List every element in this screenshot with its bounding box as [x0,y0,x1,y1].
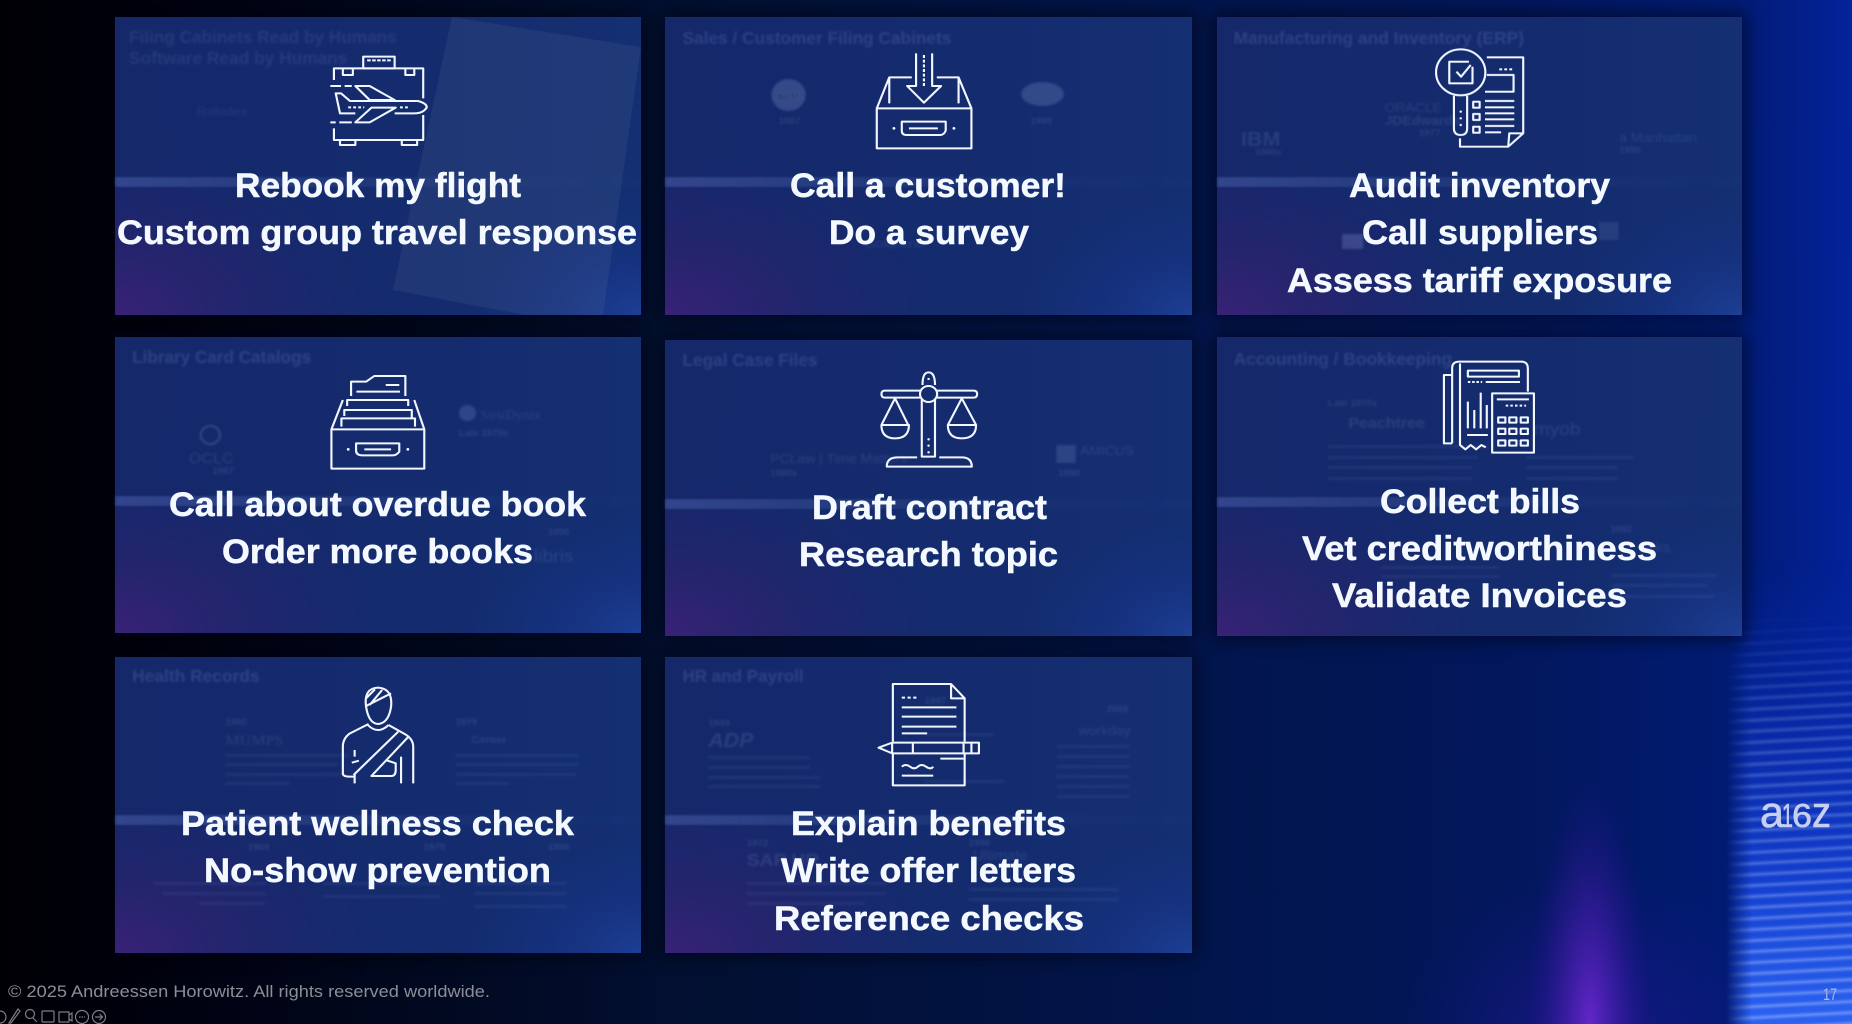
faded content [682,28,1064,251]
text: panel tasks: Validate Invoices [1332,577,1627,615]
text: panel tasks: Do a survey [829,214,1029,252]
text: panel tasks: Call suppliers [1362,214,1598,252]
icon: document with magnifier [1436,49,1523,147]
logo: a16z: 6 [1792,797,1812,834]
faded heading: Rolodex [196,104,248,119]
faded content: Library Card Catalogs [132,347,311,367]
panel: library [115,337,641,633]
faded content: Manufacturing and Inventory (ERP) [1234,28,1524,48]
text: panel tasks: No-show prevention [204,852,551,890]
faded content: 1999 [1031,116,1052,126]
faded content: workday [1078,723,1131,738]
faded content: JDEdwards [1385,113,1460,128]
faded content: Late 1970s [459,428,508,438]
text: panel tasks: Collect bills [1380,483,1580,521]
panel background [665,17,1192,315]
text: panel tasks: Custom group travel response [117,214,637,252]
faded content: 1990 [548,527,569,537]
text: panel tasks: Research topic [799,536,1058,574]
panel: health records [115,657,641,953]
panel: legal [665,340,1192,636]
icon: briefcase with plane [330,57,427,145]
faded content: 2005 [1107,704,1128,714]
text: panel tasks: Explain benefits [791,805,1066,843]
logo: a16z: 1 [1782,797,1793,834]
text: panel tasks [774,805,1084,938]
faded content: 1990 [969,838,990,848]
copyright footer: © 2025 Andreessen Horowitz. All rights reserved worldwide. [8,982,490,1001]
faded content: HR and Payroll [682,666,804,686]
text: panel tasks: Reference checks [774,900,1084,938]
faded content: Legal Case Files [682,350,817,370]
icon: patient with sling [343,688,413,783]
text: panel tasks: Assess tariff exposure [1287,262,1672,300]
faded content [1234,28,1697,249]
text: panel tasks: Vet creditworthiness [1302,530,1657,568]
faded content: 1949 [708,718,730,728]
panel: call a customer [665,17,1192,315]
faded content: Health Records [132,666,260,686]
faded content: Ultimate [973,848,1028,864]
faded content: 1990 [1619,145,1641,155]
panel background [115,17,641,315]
faded content: a Manhattan [1619,130,1697,145]
faded content: 1980s [770,468,797,478]
icon: document with pencil [879,684,979,785]
text: panel tasks: Call a customer! [790,167,1066,205]
faded content [1234,349,1717,598]
faded heading: Software Read by Humans [129,48,347,68]
text: panel tasks: Draft contract [812,489,1047,527]
panel background [115,337,641,633]
icon: card catalog drawer [331,376,424,469]
faded content: MUMPS [225,732,283,749]
faded content: 1960 [225,717,247,727]
faded content: Sales / Customer Filing Cabinets [682,28,951,48]
faded content [682,666,1131,905]
faded content: Goldmine [865,236,924,251]
panel background [115,657,641,953]
faded content: 1979 [424,842,445,852]
faded content [132,347,574,566]
faded content: 1972 [747,838,768,848]
text: panel tasks: Write offer letters [781,852,1076,890]
panel background [1217,17,1742,315]
toolbar icons [0,1009,106,1024]
panel: hr and payroll [665,657,1192,953]
faded content: SirsiDynix [480,407,541,422]
text: panel tasks [169,486,586,571]
faded content: myob [1534,419,1581,439]
icon: receipt and calculator [1444,362,1534,453]
text: panel tasks: Order more books [222,533,533,571]
faded content [132,666,579,908]
text: panel tasks: Rebook my flight [235,167,521,205]
logo: a16z [1760,788,1831,837]
faded heading [129,27,397,119]
panel: accounting [1217,337,1742,636]
page number: 17 [1823,985,1837,1004]
faded content: 1977 [1419,128,1440,138]
panel background [665,657,1192,953]
faded content: 1979 [456,717,477,727]
text: panel tasks [181,805,574,890]
faded content: 1967 [212,466,234,476]
panel: audit inventory [1217,17,1742,315]
faded content: act! [777,89,800,103]
faded content: ORACLE [1385,100,1442,115]
text: panel tasks [1287,167,1672,300]
faded heading: Filing Cabinets Read by Humans [129,27,397,47]
text: panel tasks [1302,483,1657,615]
faded content: Cerner [472,735,506,746]
logo: a16z: a [1760,788,1785,837]
text: panel tasks [117,167,637,252]
faded content: 1960s [1255,147,1282,157]
faded content: 1990 [1059,468,1080,478]
faded content: 1987 [779,116,800,126]
faded content [682,350,1134,478]
faded content: ADP [707,730,754,752]
panel background [1217,337,1742,636]
icon: inbox drawer with arrow [877,53,971,148]
faded content: OCLC [189,450,234,467]
panel background [665,340,1192,636]
faded content: Late 1970s [1328,398,1377,408]
faded content: 1987 [925,696,946,706]
faded content: AMICUS [1080,443,1134,458]
faded content: SAP HR [747,850,820,870]
text: panel tasks [790,167,1066,252]
faded content: Accounting / Bookkeeping [1234,349,1452,369]
faded content: Peachtree [1348,415,1425,432]
text: panel tasks: Audit inventory [1349,167,1610,205]
faded content: ooks [1639,540,1670,556]
text: panel tasks: Call about overdue book [169,486,586,524]
text: panel tasks: Patient wellness check [181,805,574,843]
faded content: 1969 [248,842,269,852]
panel: rebook my flight [115,17,641,315]
faded content: 1996 [548,842,569,852]
logo: a16z: z [1812,788,1831,837]
text: panel tasks [799,489,1058,574]
faded content: libris [534,546,574,566]
faded content: 1992 [1611,524,1632,534]
faded content: IBM [1241,129,1280,151]
faded content: PCLaw | Time Matters [770,451,907,466]
icon: scales of justice [881,372,977,467]
